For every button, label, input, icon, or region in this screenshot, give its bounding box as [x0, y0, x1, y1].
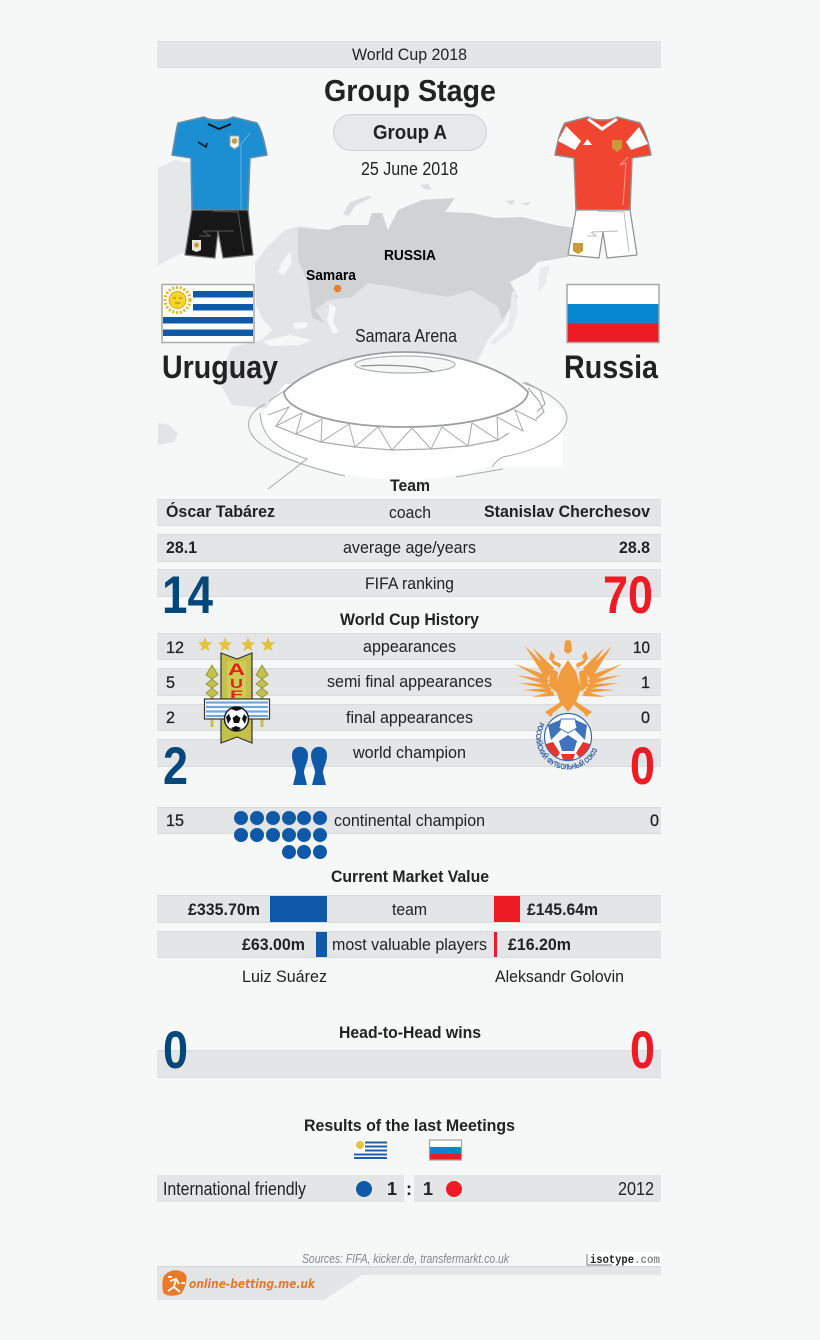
row: head-to-head wins: 0: [163, 1021, 188, 1080]
row: team market value: team: [392, 900, 427, 919]
header band: World Cup 2018: World Cup 2018: [352, 45, 467, 64]
world map background: [158, 160, 575, 445]
crest: Uruguay AUF: A: [228, 660, 245, 679]
row: coach: [157, 499, 661, 526]
map: Mediterranean and Black Sea: [262, 252, 312, 346]
row: coach: Stanislav Cherchesov: [484, 502, 651, 521]
row: team market value: £145.64m: [527, 900, 598, 919]
map label: Samara with location dot: Samara: [306, 267, 357, 284]
row: last meeting result: :: [406, 1179, 412, 1199]
small flag: Russia: [429, 1140, 462, 1160]
team name: Russia: Russia: [564, 349, 658, 385]
flag: Russia: [567, 284, 659, 342]
map: Arctic islands: [343, 184, 531, 216]
icon: four championship stars: [198, 637, 275, 651]
row: average age: [157, 534, 661, 562]
section heading: World Cup History: World Cup History: [340, 610, 479, 629]
row: final appearances: 0: [641, 708, 650, 727]
row: semi final appearances: semi final appearances: [327, 672, 492, 691]
section heading: Head-to-Head wins: Head-to-Head wins: [339, 1023, 481, 1042]
eagle body: [555, 640, 581, 712]
row: coach: coach: [389, 503, 431, 522]
stadium white base: [262, 384, 563, 480]
row: continental champion: 0: [650, 811, 659, 830]
logo wordmark: online-betting.me.uk: [189, 1276, 316, 1291]
crest: Russia football union: РОССИЙСКИЙ ФУТБОЛЬНЫЙ СОЮЗ: [536, 722, 598, 770]
eagle wing left: [515, 646, 563, 717]
map label: RUSSIA: RUSSIA: [384, 247, 436, 264]
row: team market value: [157, 895, 661, 923]
row: last meeting result: 1: [387, 1179, 397, 1199]
section heading: Results of the last Meetings: Results of the last Meetings: [304, 1116, 515, 1135]
row: final appearances: [157, 704, 661, 731]
map: Eurasia and Africa: [218, 226, 512, 412]
row: last meeting result: International friendly: [163, 1179, 306, 1199]
row: world champion: [157, 737, 661, 796]
row: head-to-head wins: 0: [630, 1021, 655, 1080]
row: continental champion: continental champion: [334, 811, 485, 830]
row: most valuable players: £16.20m: [508, 935, 571, 954]
stadium illustration: [249, 352, 567, 489]
row: average age: 28.8: [619, 538, 650, 557]
logo: online-betting runner icon: [162, 1270, 187, 1296]
stadium truss: [268, 407, 537, 450]
row: most valuable players: £63.00m: [242, 935, 305, 954]
row: final appearances: 2: [166, 708, 175, 727]
football: [544, 714, 592, 760]
row: last meeting result: 1: [423, 1179, 433, 1199]
row: appearances: [157, 633, 661, 660]
flag: Uruguay: [162, 284, 254, 342]
row: FIFA ranking: 14: [162, 566, 213, 625]
player name: Aleksandr Golovin: Aleksandr Golovin: [495, 967, 624, 986]
stadium roof: [284, 352, 528, 427]
crest ring lettering: [536, 722, 600, 769]
row: final appearances: final appearances: [346, 708, 473, 727]
venue label: Samara Arena: [355, 326, 458, 346]
row: FIFA ranking: FIFA ranking: [365, 574, 454, 593]
row: world champion: world champion: [352, 743, 466, 762]
row: semi final appearances: 5: [166, 673, 175, 692]
group pill: Group A: [373, 122, 447, 144]
team name: Uruguay: Uruguay: [162, 349, 278, 385]
row: last meeting result: 2012: [618, 1179, 654, 1199]
map: Japan and Sakhalin: [490, 265, 550, 345]
row: semi final appearances: [157, 668, 661, 696]
match date: 25 June 2018: [361, 159, 458, 179]
row: semi final appearances: 1: [641, 673, 650, 692]
icon: fifteen continental title dots: [234, 811, 327, 859]
header band: World Cup 2018: [157, 41, 661, 68]
row: head-to-head wins: [157, 1021, 661, 1080]
row: continental champion: [157, 807, 661, 834]
crest: Uruguay AUF: F: [230, 689, 244, 701]
section heading: Current Market Value: Current Market Value: [331, 867, 489, 886]
map: South America tip: [158, 423, 178, 445]
isotype credit: .com: [634, 1254, 660, 1267]
row: appearances: 10: [633, 638, 650, 657]
crest: Uruguay AUF: [204, 653, 270, 743]
icon: two world cup trophies: [292, 747, 327, 785]
row: last meeting result: [157, 1175, 661, 1202]
row: appearances: appearances: [363, 637, 456, 656]
title: Group Stage: Group Stage: [324, 73, 496, 108]
row: appearances: 12: [166, 638, 184, 657]
section heading: Team: Team: [390, 476, 430, 495]
small flag: Uruguay: [354, 1140, 387, 1160]
stadium outer ring: [249, 404, 345, 476]
group pill: [334, 114, 486, 150]
player name: Luiz Suárez: Luiz Suárez: [242, 967, 327, 986]
row: average age: average age/years: [343, 538, 476, 557]
map: Russia highlighted: [298, 198, 575, 323]
crest: Uruguay AUF: U: [230, 676, 243, 691]
row: FIFA ranking: [157, 566, 661, 625]
map label: Samara with location dot: [306, 267, 357, 292]
map: Caspian Sea: [327, 303, 339, 334]
crest: Russia football union: [515, 640, 622, 770]
row: world champion: 0: [630, 737, 655, 796]
row: FIFA ranking: 70: [603, 566, 653, 625]
row: continental champion: 15: [166, 811, 184, 830]
sources note: Sources: FIFA, kicker.de, transfermarkt.co.uk: [302, 1252, 510, 1266]
isotype credit: [585, 1252, 661, 1267]
row: coach: Óscar Tabárez: [166, 502, 275, 521]
row: team market value: £335.70m: [188, 900, 260, 919]
footer band: [157, 1266, 661, 1300]
map: Greenland: [158, 160, 192, 266]
isotype credit: isotype: [590, 1254, 634, 1267]
eagle wing right: [574, 646, 622, 717]
row: average age: 28.1: [166, 538, 197, 557]
icon: sun of May: [165, 288, 190, 312]
row: world champion: 2: [163, 737, 188, 796]
row: most valuable players: [157, 931, 661, 958]
row: most valuable players: most valuable players: [332, 935, 487, 954]
kit: Uruguay: [172, 117, 267, 258]
kit: Russia: [555, 117, 651, 258]
